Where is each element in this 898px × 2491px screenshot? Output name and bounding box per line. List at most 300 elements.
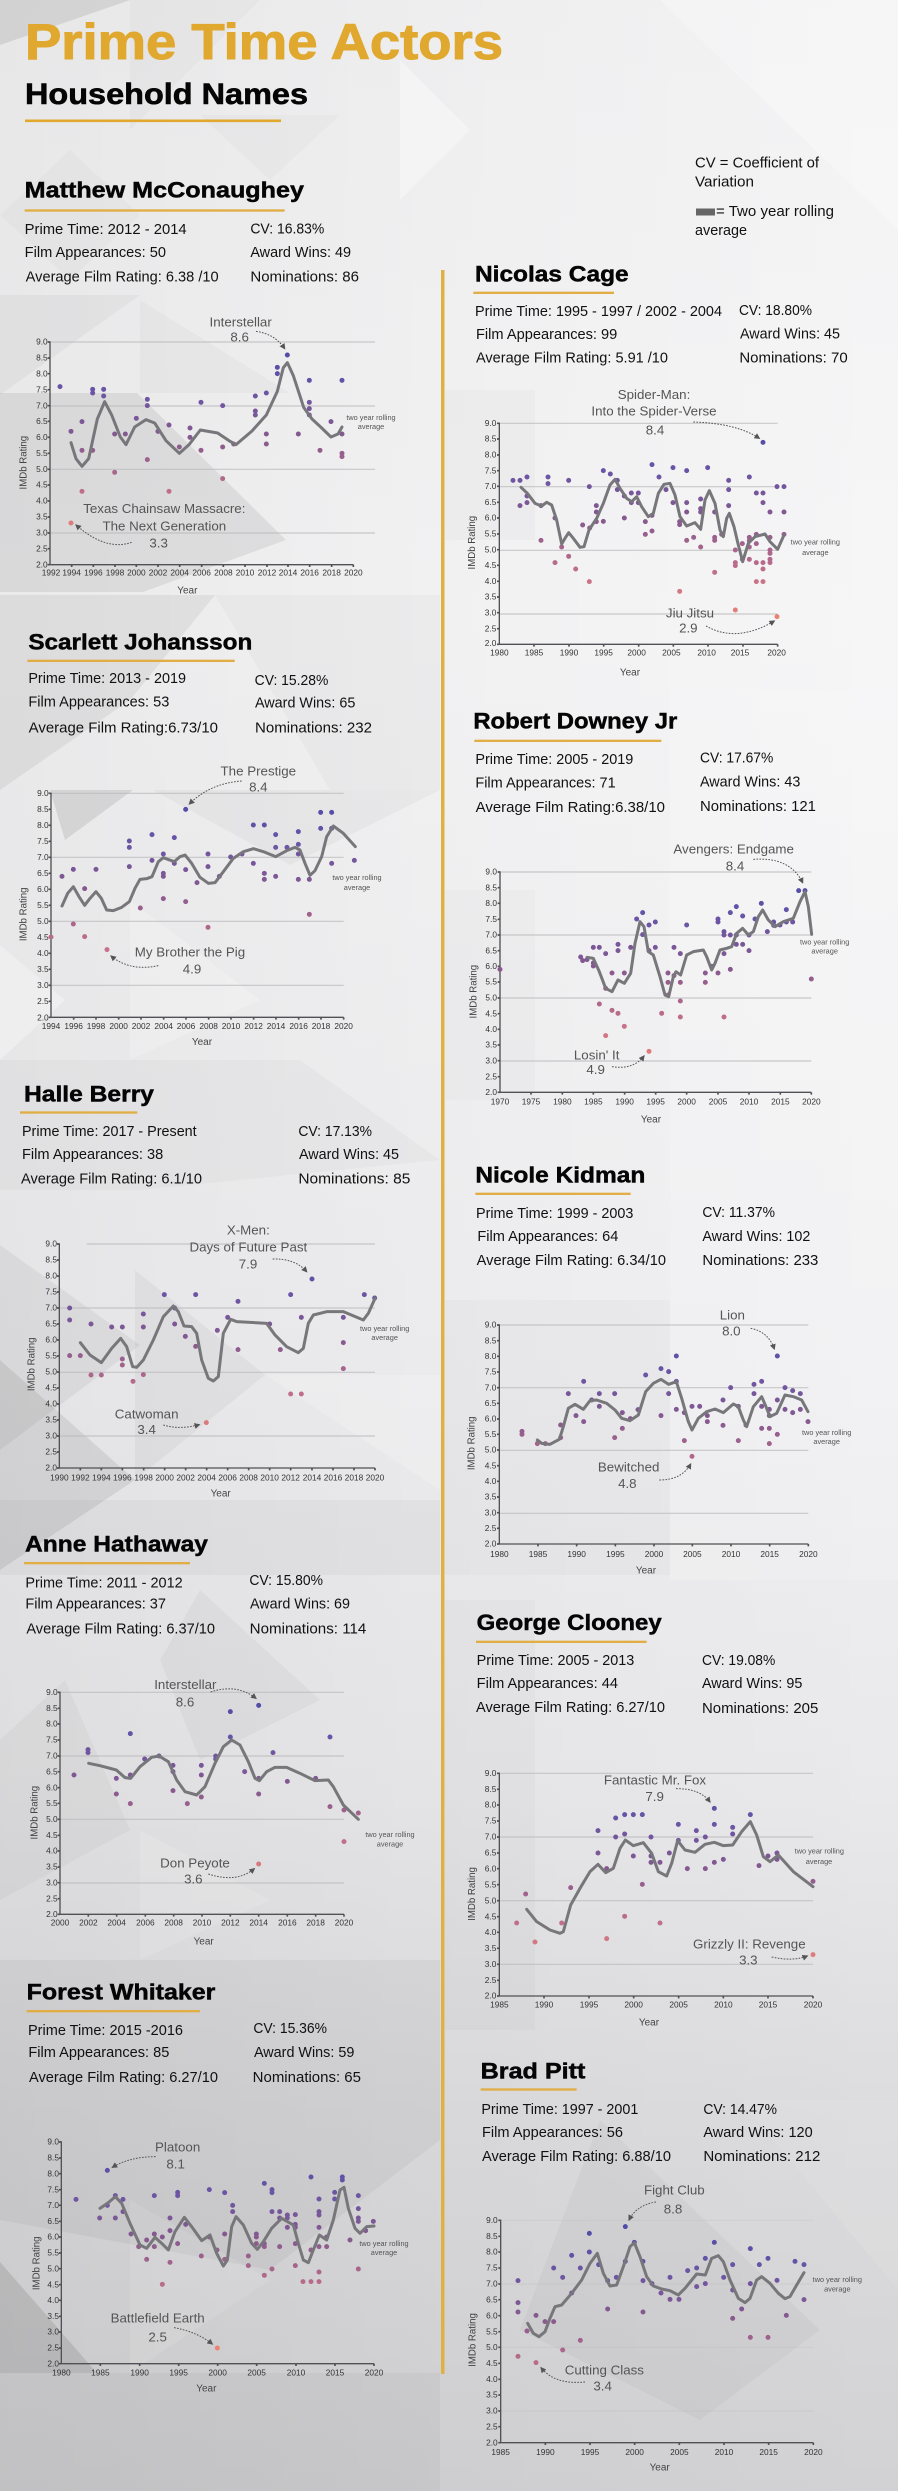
chart: Forest Whitaker ratings: 3.0 [47,2327,59,2337]
chart: Forest Whitaker ratings: 5.0 [47,2263,59,2273]
film rating dots [522,1356,808,1456]
chart: Brad Pitt ratings: 5.5 [486,2326,498,2336]
chart: Nicolas Cage ratings [467,387,840,679]
chart: Forest Whitaker ratings: 2015 [326,2368,345,2378]
chart: George Clooney ratings: 7.0 [485,1832,497,1842]
chart: Brad Pitt ratings: 1985 [491,2447,510,2457]
chart: Anne Hathaway ratings: 2020 [335,1918,354,1928]
film rating dots [60,355,342,523]
stats: Film Appearances: 37 [25,1595,166,1612]
chart: Brad Pitt ratings: 2015 [759,2447,778,2457]
stats: Average Film Rating: 6.38 /10 [26,268,219,285]
chart: Robert Downey Jr ratings: 2005 [709,1097,728,1107]
callout: lowest rated film: 4.8 [618,1476,637,1491]
film rating dots [500,891,811,1051]
chart: Nicole Kidman ratings: 5.5 [485,1429,497,1439]
callout: highest rated film: Interstellar [210,315,272,330]
callout: highest rated film: Fantastic Mr. Fox [604,1773,706,1788]
stats: Film Appearances: 50 [25,244,166,261]
chart: Scarlett Johansson ratings: 9.0 [37,788,49,798]
chart: Matthew McConaughey ratings: 1992 [42,568,61,578]
heading: Brad Pitt: Brad Pitt [481,2059,586,2084]
stats: Award Wins: 59 [254,2044,354,2061]
stats: CV: 15.36% [253,2020,327,2037]
chart: Forest Whitaker ratings: 1980 [52,2368,71,2378]
chart: Anne Hathaway ratings: 5.0 [46,1814,58,1824]
callout: highest rated film: 8.4 [249,780,268,795]
chart: Nicolas Cage ratings: 2.5 [485,623,497,633]
stats: Average Film Rating: 6.88/10 [482,2148,671,2165]
chart: Matthew McConaughey ratings [18,315,396,597]
chart: George Clooney ratings: 1995 [580,2000,599,2010]
stats [25,1572,366,1637]
chart: Brad Pitt ratings: 2000 [625,2447,644,2457]
chart: Anne Hathaway ratings: 2010 [193,1918,212,1928]
callout: lowest rated film: 4.9 [586,1062,605,1077]
callout: lowest rated film: Texas Chainsaw Massacre: [83,501,245,516]
heading underline [475,1193,631,1195]
stats: Average Film Rating: 6.1/10 [21,1170,202,1187]
callout: lowest rated film [115,1407,199,1437]
chart: Anne Hathaway ratings: 3.5 [46,1862,58,1872]
stats: Award Wins: 102 [702,1228,810,1245]
chart: Brad Pitt ratings: 2005 [670,2447,689,2457]
stats: Prime Time: 1997 - 2001 [481,2101,638,2118]
x-axis title: Year [177,586,198,597]
chart: Forest Whitaker ratings: 2000 [208,2368,227,2378]
chart: Halle Berry ratings: 5.0 [45,1367,57,1377]
stats: Award Wins: 69 [250,1595,350,1612]
chart: Anne Hathaway ratings: 2000 [51,1918,70,1928]
legend: CV and rolling average key: = Two year rolling [716,203,834,220]
callout: lowest rated film: 3.3 [739,1953,758,1968]
chart: Matthew McConaughey ratings: 4.5 [36,480,48,490]
y-axis title: IMDb Rating [467,2313,478,2367]
chart: Forest Whitaker ratings: 2.5 [47,2343,59,2353]
chart: Nicole Kidman ratings: 7.0 [485,1382,497,1392]
rolling average label [360,1324,409,1342]
chart: Forest Whitaker ratings: 4.5 [47,2279,59,2289]
film rating dots [76,2170,373,2348]
callout: lowest rated film: 4.9 [183,961,201,976]
x-axis title: Year [194,1936,214,1947]
callout: lowest rated film [111,945,245,976]
callout: highest rated film [154,1677,256,1710]
chart: Nicolas Cage ratings: 2010 [697,648,716,658]
chart: Scarlett Johansson ratings: 2006 [177,1021,196,1031]
callout: highest rated film: Platoon [155,2139,200,2154]
y-axis title: IMDb Rating [469,965,480,1018]
stats [475,302,848,367]
chart: Nicolas Cage ratings: 2015 [731,648,750,658]
stats: Prime Time: 2013 - 2019 [28,670,186,687]
stats: Prime Time: 2015 -2016 [28,2022,183,2039]
chart: Matthew McConaughey ratings: 3.5 [36,512,48,522]
panel: Nicole Kidman [466,1163,851,1576]
stats: Nominations: 114 [250,1620,366,1637]
chart: Forest Whitaker ratings: 2.0 [47,2358,59,2368]
chart: Scarlett Johansson ratings: 2020 [334,1021,353,1031]
chart: Matthew McConaughey ratings: 1994 [62,568,81,578]
rolling average label: average [824,2285,851,2294]
stats: Prime Time: 2005 - 2013 [477,1652,634,1669]
callout: highest rated film: 7.9 [239,1256,257,1271]
callout: highest rated film: X-Men: [227,1222,270,1237]
callout: highest rated film: Days of Future Past [189,1239,308,1254]
two year rolling average line [100,2187,374,2266]
rolling average label: two year rolling [360,1324,409,1333]
two year rolling average line [521,479,784,562]
chart: Forest Whitaker ratings: 8.5 [47,2153,59,2163]
stats: Nominations: 232 [255,720,372,737]
x-axis title: Year [192,1037,213,1048]
chart: Scarlett Johansson ratings: 2004 [154,1021,173,1031]
chart: Matthew McConaughey ratings: 2016 [300,568,319,578]
chart: George Clooney ratings: 2000 [624,2000,643,2010]
chart: Scarlett Johansson ratings: 2.5 [37,996,49,1006]
callout: highest rated film: 8.8 [664,2201,682,2216]
chart: Forest Whitaker ratings: 7.0 [47,2200,59,2210]
chart: Anne Hathaway ratings: 2002 [79,1918,98,1928]
stats: Average Film Rating:6.73/10 [29,720,218,737]
rolling average label [346,413,396,431]
chart: Brad Pitt ratings: 3.0 [486,2406,498,2416]
y-axis title: IMDb Rating [18,887,29,941]
chart: Anne Hathaway ratings: 2.0 [46,1909,58,1919]
chart: Robert Downey Jr ratings: 5.0 [485,993,497,1003]
x-axis title: Year [636,1565,657,1576]
legend: CV and rolling average key [695,154,834,239]
two year rolling average line [587,892,812,997]
rolling average label: two year rolling [813,2275,862,2284]
chart: Robert Downey Jr ratings: 2.0 [485,1087,497,1097]
chart: Scarlett Johansson ratings [18,764,382,1048]
chart: Forest Whitaker ratings: 1995 [169,2368,188,2378]
two year rolling average line [527,1822,813,1933]
heading: George Clooney: George Clooney [477,1610,662,1635]
stats [28,2020,361,2086]
stats: Average Film Rating: 5.91 /10 [476,350,668,367]
rolling average label: two year rolling [332,873,382,882]
stats: Film Appearances: 64 [477,1228,618,1245]
chart: Halle Berry ratings: 3.0 [45,1431,57,1441]
stats: Average Film Rating:6.38/10 [476,799,665,816]
chart: Nicolas Cage ratings: 5.5 [485,529,497,539]
chart: Forest Whitaker ratings: 7.5 [47,2184,59,2194]
chart: Halle Berry ratings: 3.5 [45,1415,57,1425]
callout: highest rated film [604,1773,710,1804]
stats: Nominations: 233 [702,1252,818,1269]
film rating dots [74,1705,358,1864]
chart: Robert Downey Jr ratings: 7.0 [485,930,497,940]
chart: Matthew McConaughey ratings: 5.5 [36,448,48,458]
stats: Award Wins: 95 [702,1675,802,1692]
chart: Brad Pitt ratings: 4.0 [486,2374,498,2384]
chart: Robert Downey Jr ratings: 2020 [802,1097,821,1107]
rolling average label: two year rolling [346,413,396,422]
chart: Halle Berry ratings: 2016 [324,1473,343,1483]
rolling average label [359,2239,409,2257]
chart: Nicole Kidman ratings: 6.0 [485,1414,497,1424]
callout: lowest rated film [574,1047,644,1077]
chart: Anne Hathaway ratings: 2008 [164,1918,183,1928]
legend: CV and rolling average key: Variation [695,174,754,190]
callout: highest rated film [112,2139,200,2171]
stats [476,1204,818,1269]
chart: Matthew McConaughey ratings: 2002 [149,568,168,578]
chart: Anne Hathaway ratings: 5.5 [46,1798,58,1808]
chart: Brad Pitt ratings: 1995 [581,2447,600,2457]
rolling average label: average [344,883,370,892]
chart: George Clooney ratings: 1985 [490,2000,509,2010]
callout: lowest rated film: 3.6 [184,1871,203,1886]
rolling average label [800,938,849,956]
stats: Award Wins: 45 [740,326,840,343]
chart: Nicole Kidman ratings: 1985 [529,1549,548,1559]
rolling average label: two year rolling [795,1847,844,1856]
chart: Robert Downey Jr ratings: 1975 [522,1097,541,1107]
callout: lowest rated film: Catwoman [115,1407,179,1422]
chart: Robert Downey Jr ratings: 5.5 [485,977,497,987]
chart: Matthew McConaughey ratings: 7.0 [36,400,48,410]
chart: Scarlett Johansson ratings: 7.5 [37,836,49,846]
chart: Nicolas Cage ratings: 8.5 [485,434,497,444]
stats: CV: 14.47% [703,2101,777,2118]
panel: Forest Whitaker [27,1979,409,2395]
heading underline [476,1641,647,1643]
chart: Forest Whitaker ratings: 2005 [247,2368,266,2378]
chart: Robert Downey Jr ratings: 3.0 [485,1055,497,1065]
stats: Film Appearances: 38 [22,1146,163,1163]
chart: George Clooney ratings: 7.5 [485,1816,497,1826]
callout: highest rated film: 8.1 [166,2156,185,2171]
rolling average label: average [806,1857,832,1866]
chart: Nicolas Cage ratings: 6.5 [485,497,497,507]
callout: highest rated film [210,315,285,349]
chart: Anne Hathaway ratings: 8.0 [46,1719,58,1729]
chart: George Clooney ratings [467,1768,844,2029]
chart: Matthew McConaughey ratings: 2004 [170,568,189,578]
chart: Nicole Kidman ratings: 3.5 [485,1492,497,1502]
callout: lowest rated film [693,1937,807,1968]
chart: Anne Hathaway ratings: 4.0 [46,1846,58,1856]
chart: Halle Berry ratings: 2008 [239,1473,258,1483]
chart: Robert Downey Jr ratings: 9.0 [485,867,497,877]
chart: Scarlett Johansson ratings: 6.0 [37,884,49,894]
callout: lowest rated film: Battlefield Earth [111,2311,205,2326]
chart: Forest Whitaker ratings: 2020 [365,2368,384,2378]
chart: Robert Downey Jr ratings: 4.5 [485,1008,497,1018]
chart: Forest Whitaker ratings: 6.5 [47,2216,59,2226]
chart: Matthew McConaughey ratings: 2020 [344,568,363,578]
chart: Matthew McConaughey ratings: 2.0 [36,559,48,569]
chart: Anne Hathaway ratings: 2006 [136,1918,155,1928]
chart: Robert Downey Jr ratings: 8.0 [485,898,497,908]
chart: Scarlett Johansson ratings: 5.0 [37,916,49,926]
rolling average label: two year rolling [365,1830,415,1839]
stats: Prime Time: 2005 - 2019 [475,751,633,768]
chart: Nicolas Cage ratings: 5.0 [485,544,497,554]
chart: Nicole Kidman ratings: 2000 [645,1549,664,1559]
film rating dots [513,442,784,617]
callout: highest rated film [189,764,296,804]
chart: Halle Berry ratings: 6.5 [45,1319,57,1329]
chart: Nicolas Cage ratings: 9.0 [485,418,497,428]
chart: Scarlett Johansson ratings: 1996 [64,1021,83,1031]
stats: Film Appearances: 99 [476,326,617,343]
chart: Anne Hathaway ratings: 9.0 [46,1687,58,1697]
rolling average label: two year rolling [791,538,840,547]
rolling average label [791,538,840,557]
chart: Anne Hathaway ratings: 6.5 [46,1766,58,1776]
chart: Robert Downey Jr ratings: 2.5 [485,1071,497,1081]
two year rolling average line [537,1379,808,1444]
callout: highest rated film [673,841,803,883]
film rating dots [70,1279,375,1423]
chart: Scarlett Johansson ratings: 7.0 [37,852,49,862]
chart: Brad Pitt ratings: 1990 [536,2447,555,2457]
callout: lowest rated film [160,1856,254,1886]
chart: Robert Downey Jr ratings: 1985 [584,1097,603,1107]
chart: Scarlett Johansson ratings: 2010 [222,1021,241,1031]
chart: Robert Downey Jr ratings: 1980 [553,1097,572,1107]
chart: Brad Pitt ratings: 5.0 [486,2342,498,2352]
chart: Nicolas Cage ratings: 2020 [767,648,786,658]
chart: Scarlett Johansson ratings: 3.5 [37,964,49,974]
callout: lowest rated film: 2.9 [679,621,698,636]
chart: George Clooney ratings: 2020 [804,2000,823,2010]
chart: Nicole Kidman ratings: 2015 [760,1549,779,1559]
rolling average label: two year rolling [800,938,849,947]
chart: George Clooney ratings: 1990 [535,2000,554,2010]
callout: highest rated film: Into the Spider-Verse [591,404,717,419]
stats: Average Film Rating: 6.37/10 [26,1620,215,1637]
chart: Anne Hathaway ratings: 2012 [221,1918,240,1928]
film rating dots [51,809,354,950]
stats: Award Wins: 45 [299,1146,399,1163]
stats: Film Appearances: 71 [475,774,616,791]
rolling average label: average [802,548,829,557]
chart: Forest Whitaker ratings: 4.0 [47,2295,59,2305]
chart: George Clooney ratings: 2005 [669,2000,688,2010]
rolling average label [332,873,382,892]
chart: Halle Berry ratings: 9.0 [45,1239,57,1249]
chart: Halle Berry ratings: 2.0 [45,1463,57,1473]
chart: Brad Pitt ratings: 8.5 [486,2231,498,2241]
chart: Brad Pitt ratings: 9.0 [486,2215,498,2225]
chart: Nicole Kidman ratings: 5.0 [485,1445,497,1455]
panel: George Clooney [467,1610,844,2029]
callout: lowest rated film [666,606,774,636]
callout: highest rated film: Fight Club [644,2183,705,2198]
y-axis title: IMDb Rating [467,1867,478,1921]
stats [21,1123,410,1187]
chart: Forest Whitaker ratings: 1985 [91,2368,110,2378]
rolling average label [813,2275,862,2294]
chart: George Clooney ratings: 3.0 [485,1959,497,1969]
chart: Robert Downey Jr ratings: 6.0 [485,961,497,971]
x-axis title: Year [639,2018,660,2029]
y-axis title: IMDb Rating [30,1786,41,1839]
chart: Matthew McConaughey ratings: 1998 [106,568,125,578]
y-axis title: IMDb Rating [27,1337,38,1391]
chart: Scarlett Johansson ratings: 4.0 [37,948,49,958]
stats: CV: 19.08% [702,1652,775,1669]
rolling average label: two year rolling [802,1428,851,1437]
chart: Brad Pitt ratings: 2.0 [486,2437,498,2447]
legend: CV and rolling average key: average [695,222,747,239]
chart: Matthew McConaughey ratings: 5.0 [36,464,48,474]
chart: Scarlett Johansson ratings: 2.0 [37,1013,49,1023]
panel: Anne Hathaway [24,1531,415,1947]
y-axis title: IMDb Rating [467,516,478,569]
chart: Halle Berry ratings [27,1222,409,1500]
panel: Nicolas Cage [467,261,848,679]
chart: Nicolas Cage ratings: 7.0 [485,481,497,491]
callout: highest rated film: Spider-Man: [618,387,690,402]
chart: George Clooney ratings: 5.0 [485,1895,497,1905]
heading: Nicolas Cage: Nicolas Cage [475,261,629,286]
subtitle: Household Names: Household Names [25,78,308,111]
panel: Matthew McConaughey [18,178,396,597]
chart: Robert Downey Jr ratings: 1990 [615,1097,634,1107]
chart: Halle Berry ratings: 2020 [366,1473,385,1483]
chart: Halle Berry ratings: 2012 [281,1473,300,1483]
y-axis title: IMDb Rating [18,436,29,489]
chart: Matthew McConaughey ratings: 2014 [279,568,298,578]
x-axis title: Year [620,668,641,679]
chart: Nicolas Cage ratings: 2005 [662,648,681,658]
stats: Nominations: 85 [298,1170,410,1187]
heading: Halle Berry: Halle Berry [24,1081,155,1106]
heading underline [481,2088,577,2091]
callout: lowest rated film [111,2311,212,2345]
chart: Anne Hathaway ratings: 2018 [306,1918,325,1928]
chart: Nicole Kidman ratings: 6.5 [485,1398,497,1408]
chart: Halle Berry ratings: 1994 [92,1473,111,1483]
stats: Nominations: 70 [739,350,848,367]
stats: Nominations: 121 [700,798,816,815]
chart: Anne Hathaway ratings: 4.5 [46,1830,58,1840]
callout: lowest rated film: Losin' It [574,1047,620,1062]
callout: highest rated film: 8.6 [176,1695,194,1710]
chart: Anne Hathaway ratings: 3.0 [46,1877,58,1887]
chart: Nicole Kidman ratings: 9.0 [485,1320,497,1330]
callout: lowest rated film [598,1459,691,1491]
chart: Nicolas Cage ratings: 2000 [627,648,646,658]
chart: Halle Berry ratings: 2.5 [45,1447,57,1457]
callout: highest rated film: Lion [720,1307,745,1322]
callout: highest rated film [189,1222,308,1272]
rolling average label [795,1847,844,1866]
chart: Robert Downey Jr ratings [469,841,849,1125]
chart: Matthew McConaughey ratings: 7.5 [36,384,48,394]
callout: lowest rated film: Jiu Jitsu [666,606,714,621]
chart: Matthew McConaughey ratings: 2006 [192,568,211,578]
chart: George Clooney ratings: 6.5 [485,1848,497,1858]
title: Prime Time Actors: Prime Time Actors [25,14,503,70]
heading underline [27,660,235,662]
chart: Halle Berry ratings: 7.5 [45,1287,57,1297]
chart: George Clooney ratings: 4.5 [485,1911,497,1921]
chart: Robert Downey Jr ratings: 3.5 [485,1040,497,1050]
chart: George Clooney ratings: 3.5 [485,1943,497,1953]
chart: Scarlett Johansson ratings: 3.0 [37,980,49,990]
chart: Matthew McConaughey ratings: 8.5 [36,353,48,363]
stats: Nominations: 86 [250,268,359,285]
chart: Matthew McConaughey ratings: 6.0 [36,432,48,442]
chart: Halle Berry ratings: 2000 [155,1473,174,1483]
